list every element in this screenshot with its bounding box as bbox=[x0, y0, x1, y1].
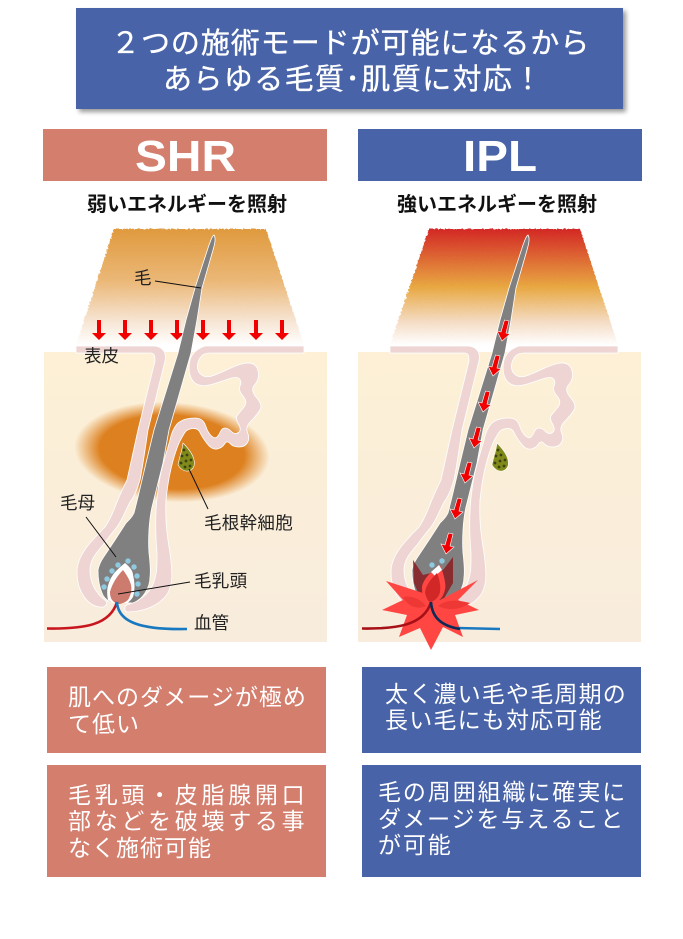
subheading: strong energy: 強いエネルギーを照射 bbox=[397, 193, 597, 216]
heading: SHR: SHR bbox=[135, 132, 236, 181]
light beam bbox=[76, 229, 304, 345]
labels: 毛母 bbox=[60, 493, 95, 513]
text box: IPL benefit 2: が可能 bbox=[378, 832, 453, 858]
light arrows bbox=[92, 320, 289, 340]
vessels bbox=[47, 602, 187, 629]
follicle structure bbox=[390, 235, 618, 612]
labels: 毛 bbox=[134, 268, 152, 288]
heading: SHR bbox=[43, 129, 327, 181]
text box: IPL benefit 1: 太く濃い毛や毛周期の bbox=[385, 681, 627, 707]
light beam bbox=[390, 229, 618, 345]
subheading: weak energy: 弱いエネルギーを照射 bbox=[87, 193, 287, 216]
skin bbox=[44, 352, 327, 642]
hair bbox=[98, 235, 215, 603]
text box: IPL benefit 2: ダメージを与えること bbox=[378, 806, 625, 832]
leader lines bbox=[86, 281, 208, 594]
title banner: あらゆる毛質･肌質に対応！ bbox=[163, 63, 544, 96]
melanin area bbox=[71, 395, 273, 509]
gland bbox=[178, 443, 194, 471]
vessels bbox=[362, 602, 500, 629]
burst bbox=[382, 557, 479, 650]
labels: 毛根幹細胞 bbox=[204, 513, 293, 533]
text box: SHR benefit 1: て低い bbox=[68, 711, 140, 737]
text box: IPL benefit 1 bbox=[362, 667, 641, 753]
heading: IPL: IPL bbox=[463, 132, 537, 181]
text box: IPL benefit 2: 毛の周囲組織に確実に bbox=[378, 779, 627, 805]
title banner: ２つの施術モードが可能になるから bbox=[111, 27, 590, 60]
labels: 血管 bbox=[194, 613, 229, 633]
title banner bbox=[76, 8, 626, 112]
heading: IPL bbox=[358, 129, 642, 181]
labels bbox=[60, 268, 293, 633]
text box: SHR benefit 2: 毛乳頭・皮脂腺開口 bbox=[68, 782, 308, 808]
hair arrows bbox=[441, 320, 510, 554]
text box: SHR benefit 2: 部などを破壊する事 bbox=[68, 808, 308, 834]
text box: SHR benefit 2 bbox=[47, 765, 326, 877]
text box: SHR benefit 1 bbox=[47, 667, 326, 753]
text box: SHR benefit 1: 肌へのダメージが極め bbox=[68, 684, 307, 710]
diagram: IPL follicle bbox=[358, 229, 641, 650]
follicle sheath bbox=[76, 346, 304, 612]
diagram: SHR follicle bbox=[44, 229, 327, 642]
text box: SHR benefit 2: なく施術可能 bbox=[68, 835, 212, 861]
stem cells bbox=[101, 558, 141, 597]
text box: IPL benefit 1: 長い毛にも対応可能 bbox=[385, 707, 603, 733]
labels: 表皮 bbox=[84, 346, 119, 366]
papilla bbox=[107, 563, 134, 604]
text box: IPL benefit 2 bbox=[362, 765, 641, 877]
labels: 毛乳頭 bbox=[194, 571, 248, 591]
skin bbox=[358, 352, 641, 642]
